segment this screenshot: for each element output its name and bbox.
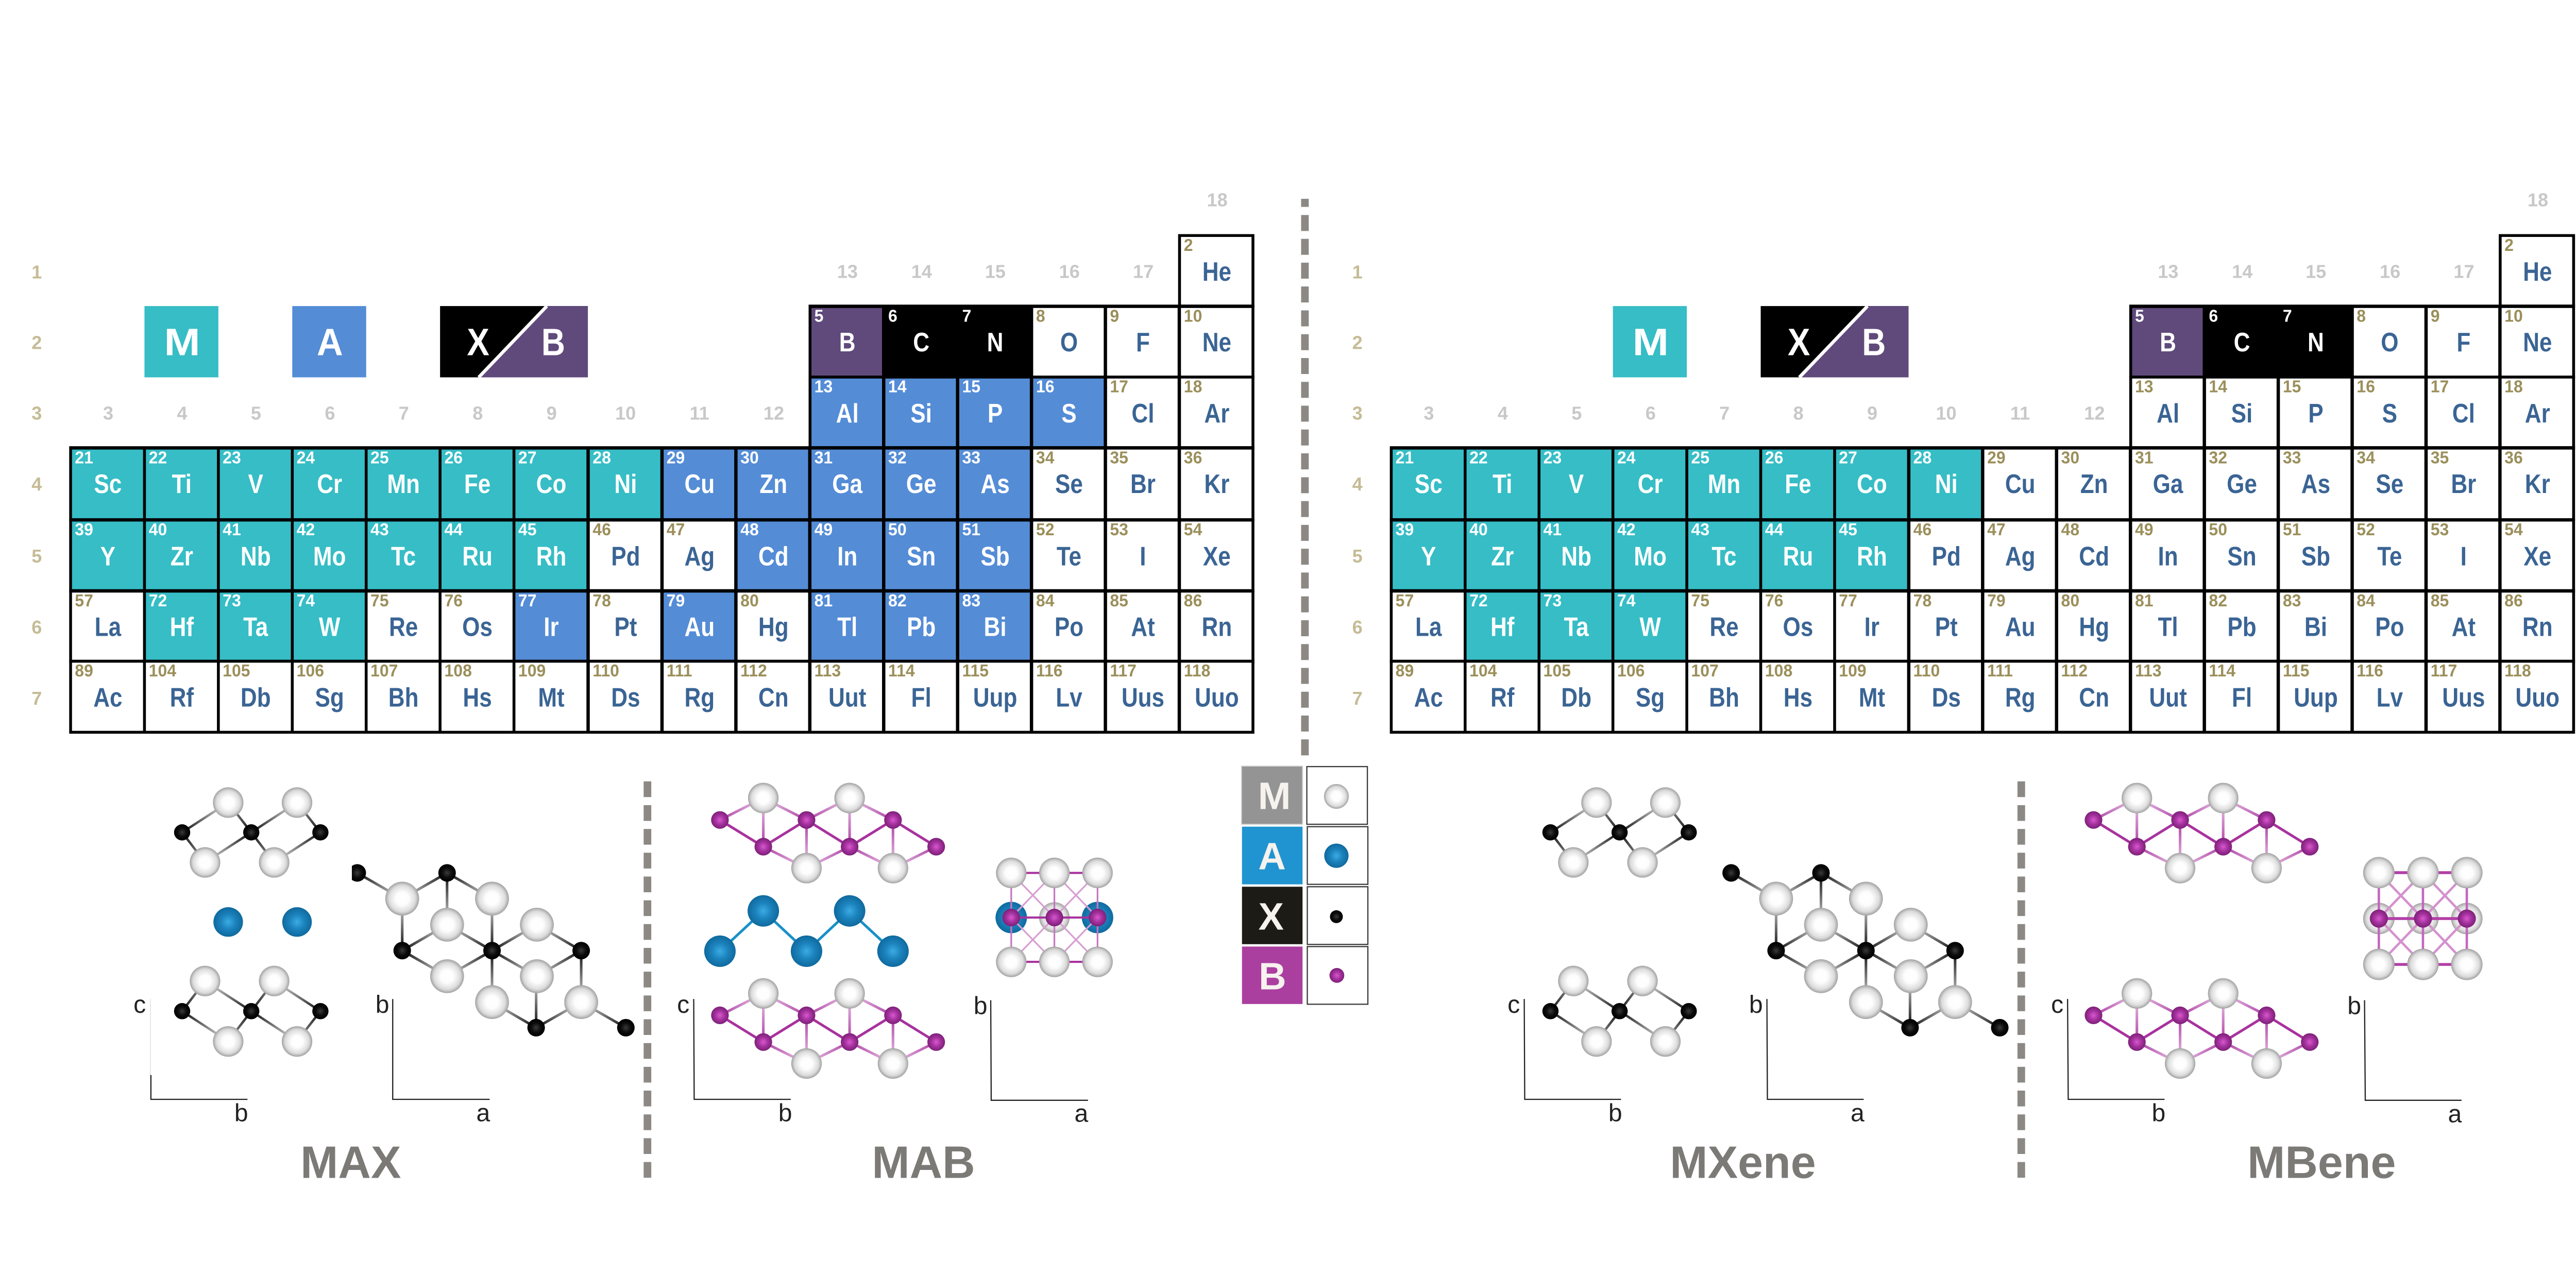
period 5: Rh (1857, 541, 1887, 571)
period 5: Cd (758, 541, 788, 571)
panel: right periodic table for MXene and MBene (1390, 234, 2575, 735)
group numbers, right table: 11 (2010, 402, 2030, 423)
group numbers, right table (1423, 190, 2548, 423)
period 5: Ru (463, 541, 493, 571)
period 6 (69, 589, 1255, 663)
MAX side view axes: b (234, 1099, 248, 1127)
period 5: Nb (1562, 541, 1591, 571)
period 6: Bi (2304, 612, 2327, 642)
group numbers, right table: 17 (2453, 261, 2475, 282)
period 4: Co (536, 469, 567, 499)
period 5 (69, 518, 1255, 592)
group numbers, right table: 10 (1936, 402, 1957, 423)
period 6: Re (389, 612, 418, 642)
period 6: Re (1710, 612, 1739, 642)
period 2: F (2456, 327, 2470, 357)
period 7: Mt (538, 682, 565, 712)
period numbers, left table: 6 (31, 617, 42, 638)
group numbers, right table: 6 (1646, 402, 1656, 423)
period 5: Mo (313, 541, 346, 571)
MAX side view axes: c (133, 991, 146, 1018)
period 3 (808, 376, 1255, 449)
period 7: Cn (2079, 682, 2109, 712)
period 4: Fe (1785, 469, 1811, 499)
period 4: Ge (906, 469, 936, 499)
MXene plan view axes: b (1749, 991, 1763, 1018)
period 5: Sb (980, 541, 1009, 571)
key box M, right table (1613, 306, 1687, 377)
key box X and B, right table (1761, 306, 1908, 377)
period 4: Ge (2227, 469, 2257, 499)
period 7: Uut (2149, 682, 2187, 712)
right dashed divider between MXene and MBene (2017, 782, 2025, 1179)
period numbers, left table: 1 (31, 261, 42, 282)
group numbers, right table: 16 (2380, 261, 2400, 282)
period 7: Fl (911, 682, 931, 712)
period 6: Os (463, 612, 493, 642)
period 6: Pt (614, 612, 637, 642)
period 1: He (1202, 257, 1231, 286)
MBene side view structure (2084, 783, 2318, 1079)
period 5: Xe (1203, 541, 1231, 571)
period 5: Nb (241, 541, 271, 571)
period 5: Rh (536, 541, 567, 571)
group numbers, right table: 4 (1498, 402, 1508, 423)
period 4: Sc (94, 469, 122, 499)
group numbers, left table: 3 (103, 402, 113, 423)
period 2: C (913, 327, 929, 357)
period 6: At (1131, 612, 1155, 642)
group numbers, right table: 18 (2528, 190, 2548, 211)
period 3: P (2308, 398, 2323, 428)
element legend: A swatch and sphere: A (1258, 835, 1286, 878)
period numbers, right table: 7 (1352, 688, 1363, 709)
MAX plan view axes: b (376, 991, 389, 1018)
period 7: Uup (2294, 682, 2337, 712)
period 5: Cd (2079, 541, 2109, 571)
left dashed divider between MAX and MAB (643, 782, 652, 1179)
element legend: X swatch and sphere: X (1258, 895, 1284, 938)
group numbers, left table: 17 (1133, 261, 1154, 282)
group numbers, right table: 15 (2306, 261, 2326, 282)
period 3 (2129, 376, 2575, 449)
period 6: Au (684, 612, 715, 642)
group numbers, left table: 4 (177, 402, 188, 423)
period 4: Se (1055, 469, 1083, 499)
period numbers, right table: 3 (1352, 402, 1363, 423)
period 7: Lv (1056, 682, 1082, 712)
key box X and B, right table: B (1862, 320, 1886, 363)
period numbers, left table (31, 261, 42, 709)
period 1 (2499, 234, 2575, 308)
period 6: Ta (1564, 612, 1589, 642)
element legend: B swatch and sphere (1242, 946, 1368, 1004)
MAX plan view axes (376, 991, 490, 1127)
period 7 (69, 660, 1255, 734)
period 4: Ni (1935, 469, 1957, 499)
period 4: As (980, 469, 1009, 499)
period numbers, right table: 6 (1352, 617, 1363, 638)
period 6: Os (1783, 612, 1814, 642)
period 7: Fl (2232, 682, 2252, 712)
period 4: Cu (684, 469, 715, 499)
period 4: Sc (1415, 469, 1443, 499)
period 6: Hg (758, 612, 788, 642)
group numbers, left table: 6 (325, 402, 335, 423)
period 4: Kr (1204, 469, 1229, 499)
MAB side view axes: c (677, 991, 689, 1018)
period 7: Sg (1636, 682, 1665, 712)
period 5: In (837, 541, 857, 571)
period 4: Fe (464, 469, 491, 499)
period 3: S (1061, 398, 1077, 428)
period 4: Ti (1493, 469, 1513, 499)
MBene plan view axes (2347, 992, 2462, 1128)
period 4: Ti (172, 469, 192, 499)
period 2: O (1060, 327, 1078, 357)
period 6: La (95, 612, 121, 642)
group numbers, right table: 14 (2232, 261, 2252, 282)
period 2: B (839, 327, 855, 357)
period 4: V (248, 469, 263, 499)
period 4 (1390, 446, 2575, 521)
period 5: Ag (2005, 541, 2035, 571)
period 5: Pd (1931, 541, 1960, 571)
period 5: Mo (1634, 541, 1667, 571)
period 7: Sg (315, 682, 344, 712)
period 5: Y (100, 541, 115, 571)
group numbers, left table: 18 (1207, 190, 1228, 211)
group numbers, left table: 12 (764, 402, 784, 423)
period 7: Uuo (2515, 682, 2560, 712)
period 7 (1390, 660, 2575, 734)
period 4: Br (1130, 469, 1156, 499)
MXene plan view structure (1722, 864, 2009, 1037)
MBene side view axes: c (2051, 991, 2063, 1018)
period 5: Tc (1712, 541, 1737, 571)
group numbers, left table: 9 (547, 402, 557, 423)
group numbers, right table: 8 (1793, 402, 1804, 423)
period 6: Au (2005, 612, 2035, 642)
period 5: I (2460, 541, 2467, 571)
MXene side view axes (1507, 991, 1622, 1127)
period 3: Al (2157, 398, 2179, 428)
period 6: Bi (984, 612, 1006, 642)
period 6: W (1640, 612, 1661, 642)
period 7: Bh (1709, 682, 1739, 712)
period 5: Tc (391, 541, 416, 571)
period 7: Db (1562, 682, 1591, 712)
period 4: Ga (2153, 469, 2183, 499)
element legend: X swatch and sphere (1242, 887, 1368, 944)
period 2: Ne (1202, 327, 1231, 357)
period 5: Te (2377, 541, 2402, 571)
MAB side view axes: b (778, 1099, 792, 1127)
period 2 (808, 304, 1255, 379)
period 7: Rg (684, 682, 715, 712)
group numbers, left table: 7 (399, 402, 409, 423)
MXene plan view axes: a (1851, 1099, 1865, 1127)
period 5: I (1140, 541, 1146, 571)
period 6: Ir (544, 612, 559, 642)
period 7: Uup (973, 682, 1017, 712)
period 4: Mn (387, 469, 420, 499)
period numbers, left table: 7 (31, 688, 42, 709)
period 7: Mt (1859, 682, 1886, 712)
period 4: Kr (2525, 469, 2550, 499)
key box A, left table (292, 306, 366, 377)
key box M, left table: M (164, 320, 200, 363)
period 7: Rf (170, 682, 194, 712)
period 5: Sn (907, 541, 936, 571)
period 7: Hs (463, 682, 492, 712)
group numbers, left table: 8 (472, 402, 483, 423)
MAB plan view axes (974, 992, 1088, 1127)
period 5: Ag (684, 541, 715, 571)
period 3: P (988, 398, 1003, 428)
period 7: Bh (388, 682, 419, 712)
period 6: W (319, 612, 341, 642)
MAX plan view structure (343, 860, 635, 1037)
period 4: Zn (759, 469, 787, 499)
key box X and B, left table (440, 306, 588, 377)
period 5: Sn (2227, 541, 2256, 571)
period numbers, right table: 4 (1352, 473, 1363, 495)
period 4: Cu (2005, 469, 2035, 499)
MXene plan view axes (1749, 991, 1865, 1127)
period 4: Se (2376, 469, 2403, 499)
period numbers, left table: 2 (31, 332, 42, 353)
period 6: Po (2375, 612, 2404, 642)
key box M, right table: M (1633, 320, 1669, 363)
period 5: Te (1057, 541, 1081, 571)
key box X and B, left table: X (467, 320, 489, 363)
period 2: Ne (2523, 327, 2552, 357)
key box X and B, left table: B (541, 320, 565, 363)
period 6: Ta (244, 612, 268, 642)
MBene side view axes (2051, 991, 2165, 1127)
period 7: Uus (1122, 682, 1164, 712)
period 6: Po (1055, 612, 1083, 642)
period 6: Tl (2158, 612, 2178, 642)
period 4: V (1569, 469, 1584, 499)
group numbers, right table: 9 (1867, 402, 1877, 423)
period numbers, left table: 5 (31, 546, 42, 567)
period 1: He (2523, 257, 2552, 286)
MXene side view axes: c (1507, 991, 1520, 1018)
central vertical dashed divider (1301, 199, 1309, 756)
element legend: M swatch and sphere (1242, 766, 1367, 824)
period 2: F (1136, 327, 1150, 357)
group numbers, right table: 3 (1423, 402, 1434, 423)
period 1 (1178, 234, 1255, 308)
period 2: B (2160, 327, 2176, 357)
period 6 (1390, 589, 2575, 663)
period 2 (2129, 304, 2575, 379)
period 7: Uuo (1195, 682, 1239, 712)
period numbers, right table (1352, 261, 1363, 709)
group numbers, right table: 5 (1571, 402, 1582, 423)
period 7: Hs (1784, 682, 1813, 712)
MAX side view axes (133, 991, 248, 1127)
period 4: Cr (1638, 469, 1663, 499)
group numbers, left table: 11 (690, 402, 709, 423)
group numbers, left table: 16 (1059, 261, 1080, 282)
period 7: Cn (758, 682, 788, 712)
MBene plan view structure (2363, 857, 2483, 980)
period 2: C (2233, 327, 2250, 357)
period 4: Mn (1708, 469, 1741, 499)
period 7: Ds (1931, 682, 1960, 712)
period 3: Cl (1131, 398, 1154, 428)
MAB side view structure (704, 783, 945, 1079)
period 2: N (2308, 327, 2324, 357)
period 4: Co (1857, 469, 1887, 499)
MXene side view structure (1543, 787, 1697, 1057)
MBene plan view axes: a (2448, 1100, 2462, 1128)
group numbers, right table: 7 (1719, 402, 1730, 423)
period 3: Si (2231, 398, 2252, 428)
period 6: Pt (1935, 612, 1957, 642)
group numbers, right table: 13 (2158, 261, 2178, 282)
period 3: Ar (1204, 398, 1229, 428)
group numbers, left table: 15 (985, 261, 1006, 282)
period 5: In (2158, 541, 2178, 571)
period 5 (1390, 518, 2575, 592)
period 5: Ru (1783, 541, 1814, 571)
group numbers, left table: 5 (251, 402, 261, 423)
period 4: Ga (832, 469, 862, 499)
period 4: Ni (614, 469, 637, 499)
period 2: O (2381, 327, 2398, 357)
period 5: Xe (2523, 541, 2551, 571)
period 3: S (2382, 398, 2397, 428)
period 7: Uut (828, 682, 866, 712)
period numbers, left table: 3 (31, 402, 42, 423)
MAB plan view axes: a (1074, 1099, 1088, 1127)
period 6: Pb (907, 612, 936, 642)
panel: left periodic table for MAX and MAB (69, 234, 1255, 735)
period 4: Br (2451, 469, 2476, 499)
period 7: Rg (2005, 682, 2035, 712)
key box X and B, right table: X (1788, 320, 1810, 363)
period numbers, right table: 2 (1352, 332, 1363, 353)
group numbers, left table: 10 (615, 402, 636, 423)
element legend: A swatch and sphere (1242, 827, 1368, 885)
period 3: Ar (2525, 398, 2550, 428)
period 7: Db (241, 682, 271, 712)
period 6: Tl (837, 612, 857, 642)
MAB plan view structure (995, 858, 1113, 977)
period numbers, right table: 1 (1352, 261, 1363, 282)
MBene plan view axes: b (2347, 992, 2361, 1020)
period 5: Y (1421, 541, 1436, 571)
period 6: Ir (1865, 612, 1880, 642)
period 2: N (987, 327, 1003, 357)
key box M, left table (144, 306, 218, 377)
MAX side view structure (174, 787, 329, 1057)
MAB side view axes (677, 991, 792, 1127)
MBene side view axes: b (2152, 1099, 2165, 1127)
period 7: Ds (611, 682, 640, 712)
period 4 (69, 446, 1255, 521)
period 6: La (1415, 612, 1442, 642)
period 3: Cl (2452, 398, 2475, 428)
period 4: Zn (2080, 469, 2108, 499)
period 6: Rn (2522, 612, 2552, 642)
group numbers, left table (103, 190, 1228, 423)
element legend: B swatch and sphere: B (1259, 955, 1286, 998)
MAX plan view axes: a (477, 1099, 490, 1127)
period 5: Zr (1491, 541, 1514, 571)
period 6: Hf (170, 612, 194, 642)
key box A, left table: A (317, 320, 343, 363)
period 5: Zr (171, 541, 193, 571)
period 5: Pd (611, 541, 640, 571)
period 3: Al (836, 398, 859, 428)
period 7: Ac (1414, 682, 1443, 712)
period 4: As (2301, 469, 2330, 499)
period 3: Si (910, 398, 932, 428)
period 6: Hf (1490, 612, 1515, 642)
MAB plan view axes: b (974, 992, 987, 1020)
group numbers, left table: 14 (911, 261, 932, 282)
period 7: Lv (2376, 682, 2403, 712)
period 6: At (2451, 612, 2476, 642)
period 7: Ac (93, 682, 123, 712)
period 6: Hg (2079, 612, 2109, 642)
period 5: Sb (2301, 541, 2330, 571)
period 7: Rf (1490, 682, 1515, 712)
MXene side view axes: b (1608, 1099, 1622, 1127)
period 6: Rn (1201, 612, 1232, 642)
period 4: Cr (317, 469, 343, 499)
period numbers, right table: 5 (1352, 546, 1363, 567)
period 6: Pb (2227, 612, 2256, 642)
period numbers, left table: 4 (31, 473, 42, 495)
period 7: Uus (2442, 682, 2485, 712)
group numbers, left table: 13 (837, 261, 858, 282)
element legend: M swatch and sphere: M (1258, 774, 1291, 817)
group numbers, right table: 12 (2084, 402, 2105, 423)
